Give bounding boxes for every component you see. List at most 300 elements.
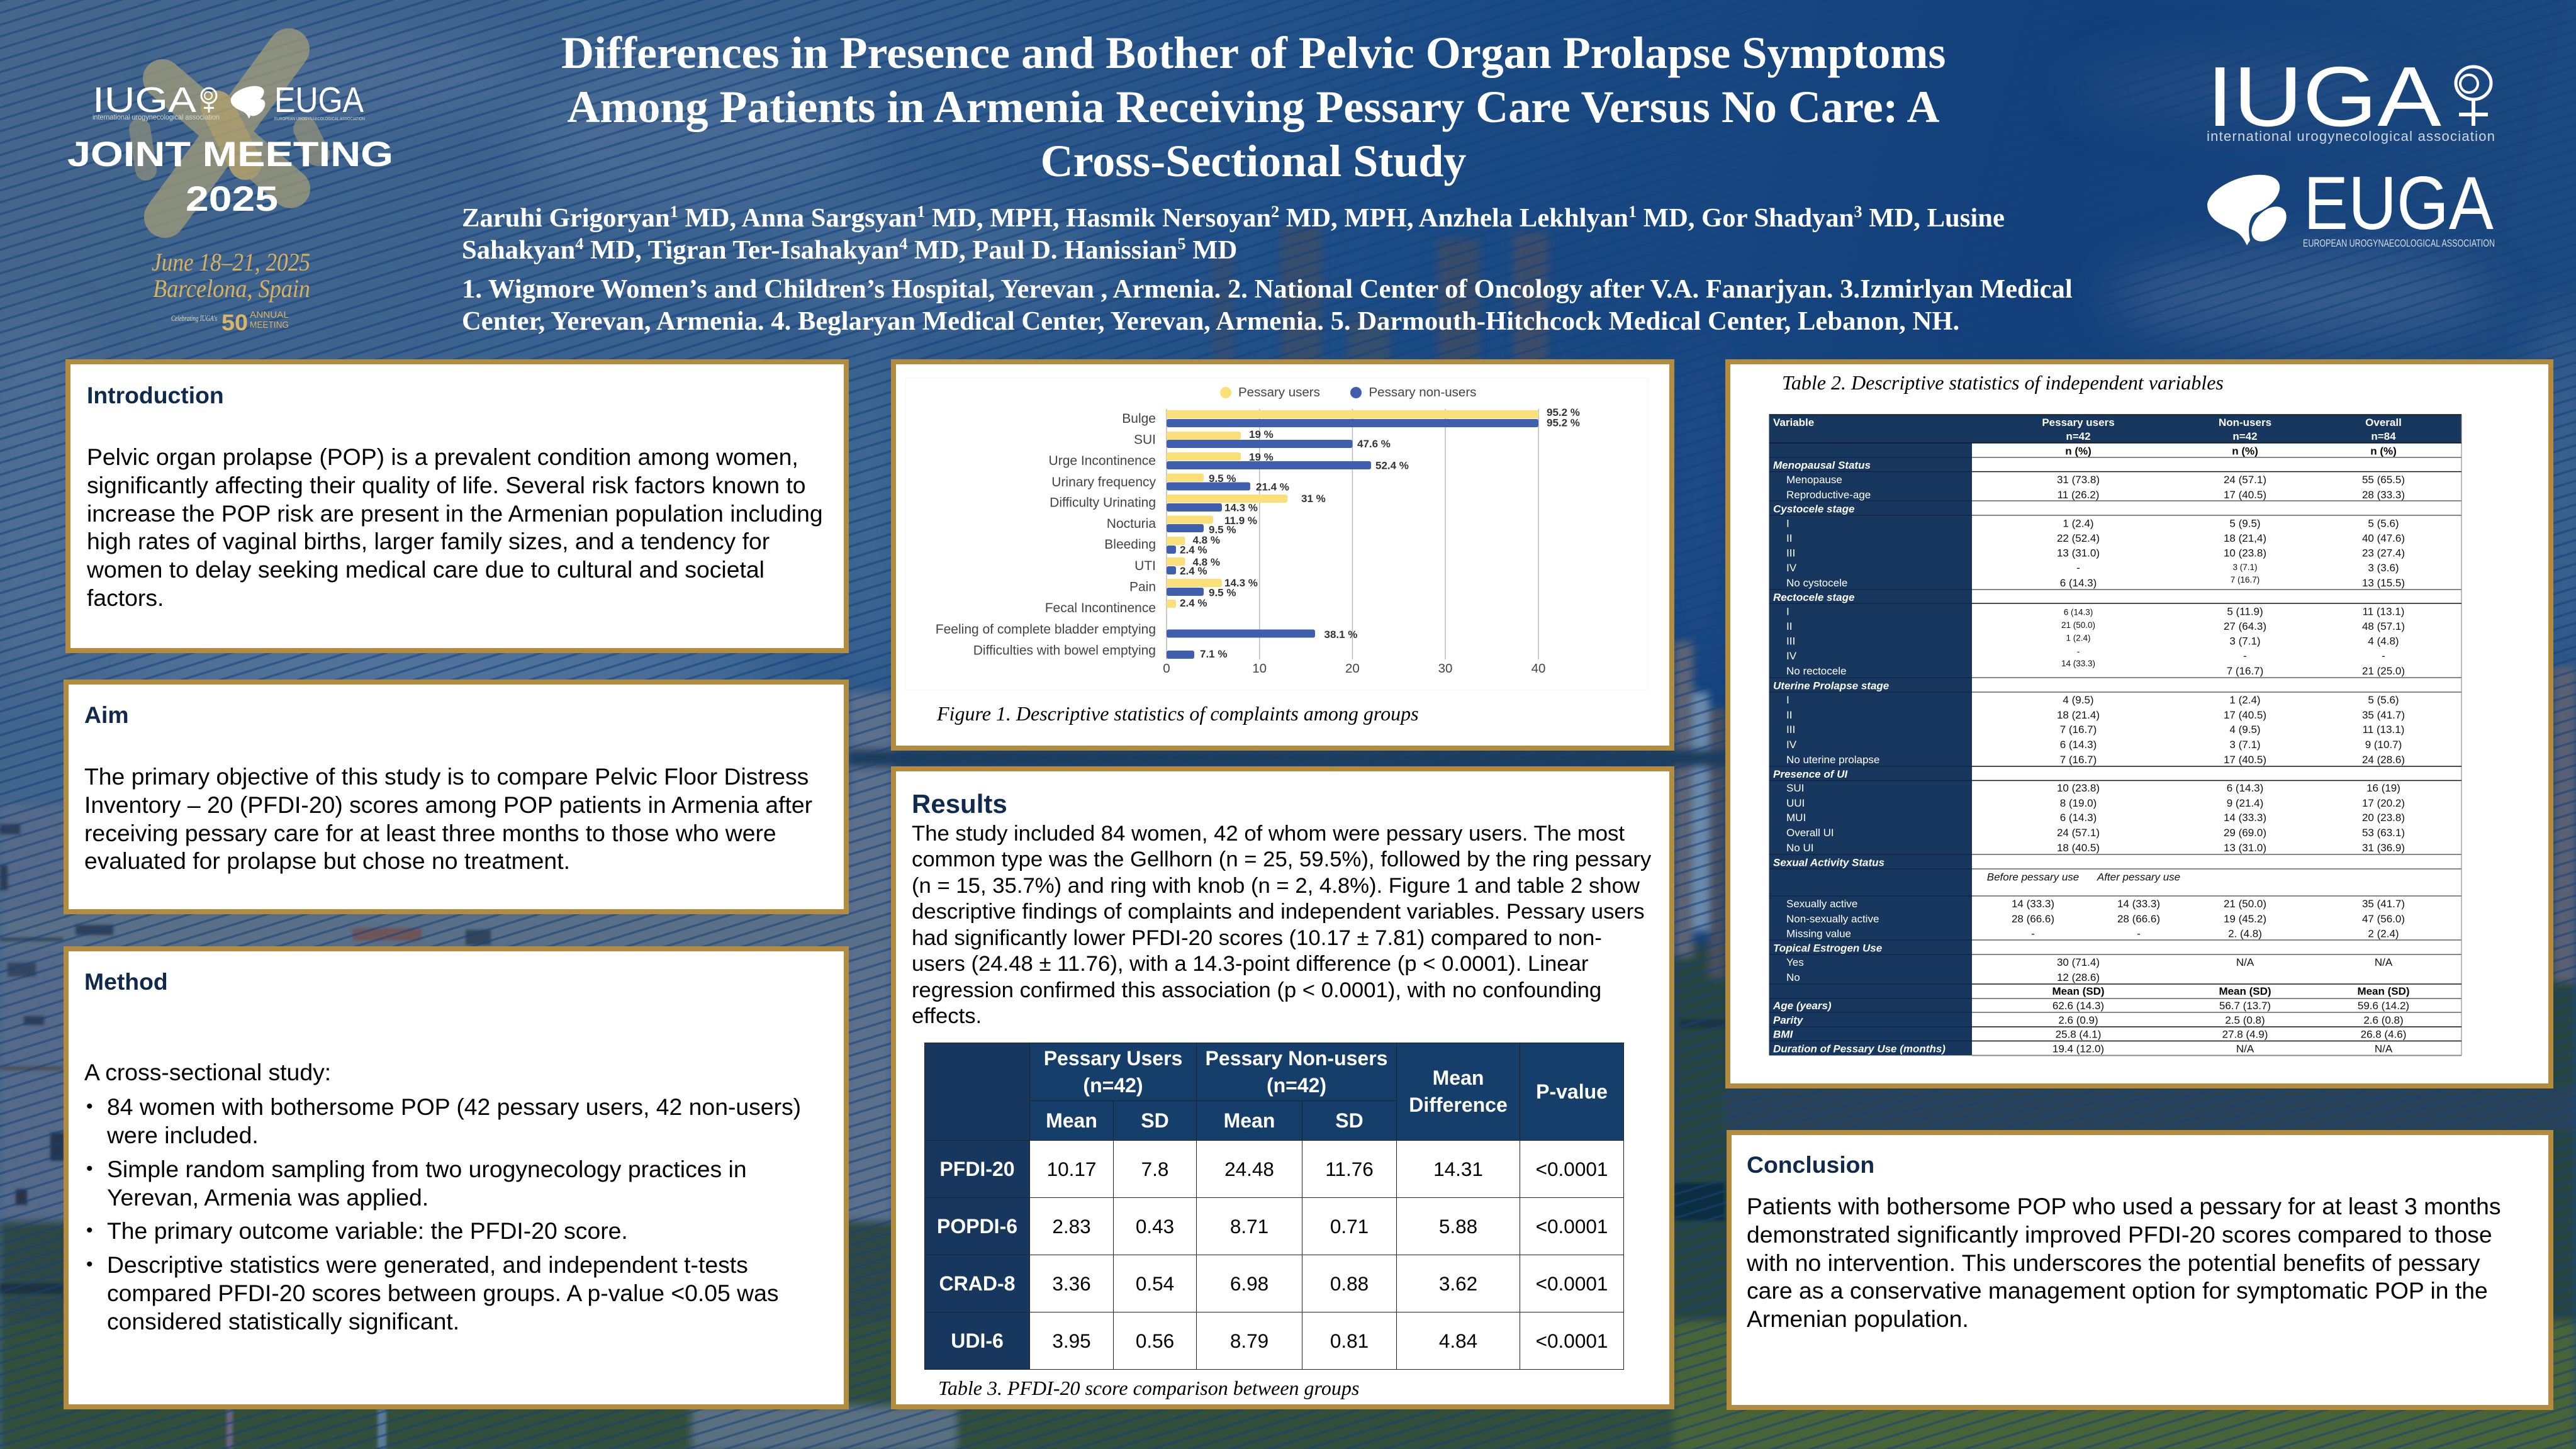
introduction text: significantly affecting their quality of life. Several risk factors known to (87, 472, 805, 498)
row group: cystocele stage: 18 (21,4) (2224, 532, 2266, 544)
gold X emblem (140, 49, 318, 217)
bar value labels: 95.2 % (1547, 417, 1580, 429)
row group: rectocele stage: 5 (11.9) (2227, 605, 2263, 617)
table header: Overall (2365, 417, 2402, 428)
introduction text: increase the POP risk are present in the Armenian population including (87, 500, 823, 527)
table header: n=42 (2232, 430, 2258, 442)
row group: rectocele stage: 6 (14.3) (2064, 608, 2093, 617)
authors: Zaruhi Grigoryan1 MD, Anna Sargsyan1 MD, MPH, Hasmik Nersoyan2 MD, MPH, Anzhela Lekhlyan1 MD, Gor Shadyan3 MD, Lusine (462, 202, 2005, 233)
table header: Pessary users (2042, 417, 2115, 428)
row group: rectocele stage: 21 (25.0) (2362, 665, 2405, 677)
row group: continuous variables: 26.8 (4.6) (2361, 1028, 2406, 1040)
table 3: PFDI-20 comparison: 0.54 (1136, 1272, 1174, 1295)
row group: cystocele stage: 5 (9.5) (2229, 517, 2261, 529)
results text: common type was the Gellhorn (n = 25, 59.5%), followed by the ring pessary (912, 848, 1651, 871)
row group: uterine prolapse stage: 17 (40.5) (2224, 754, 2266, 766)
table 3: PFDI-20 comparison: Mean (1224, 1109, 1275, 1131)
table 3: PFDI-20 comparison: 14.31 (1433, 1158, 1483, 1180)
panel: table 2 (1725, 359, 2553, 1088)
table 3: PFDI-20 comparison: SD (1335, 1109, 1364, 1131)
row group: menopausal status: 55 (65.5) (2362, 474, 2405, 486)
row group: uterine prolapse stage: 17 (40.5) (2224, 709, 2266, 721)
x axis labels (1163, 661, 1545, 676)
row group: continuous variables: 19.4 (12.0) (2052, 1043, 2104, 1055)
table 3: PFDI-20 comparison: 4.84 (1439, 1329, 1477, 1351)
table 2: descriptive statistics (1765, 409, 2467, 1060)
bar value labels: 9.5 % (1209, 523, 1236, 536)
bar value labels: 4.8 % (1193, 534, 1220, 546)
panel: aim (64, 680, 849, 914)
panel: method: • (86, 1254, 93, 1275)
table 3: PFDI-20 comparison: 7.8 (1141, 1158, 1168, 1180)
row group: uterine prolapse stage: 4 (9.5) (2063, 694, 2094, 706)
introduction text: women to delay seeking medical care due to cultural and societal (87, 556, 764, 583)
authors (462, 202, 2005, 265)
row group: uterine prolapse stage (1773, 680, 2405, 766)
heading: method: Method (84, 968, 168, 995)
table 3: PFDI-20 comparison: PFDI-20 (939, 1158, 1015, 1180)
row group: sexual activity status: After pessary use (2097, 871, 2180, 883)
50th annual meeting mark: ANNUAL (250, 310, 289, 320)
aim text: evaluated for prolapse but chose no treatment. (84, 848, 570, 874)
row group: presence of UI: 24 (57.1) (2057, 827, 2100, 839)
results text: users (24.48 ± 11.76), with a 14.3-point difference (p < 0.0001). Linear (912, 952, 1588, 976)
row group: uterine prolapse stage: 9 (10.7) (2365, 739, 2402, 751)
row group: rectocele stage: II (1786, 620, 1792, 632)
caption: table 3: Table 3. PFDI-20 score comparison between groups (938, 1377, 1359, 1399)
panel: results (891, 766, 1674, 1409)
row group: presence of UI: 14 (33.3) (2224, 812, 2266, 824)
row group: rectocele stage: Rectocele stage (1773, 591, 1854, 603)
table 3: PFDI-20 comparison: P-value (1536, 1080, 1608, 1102)
row group: continuous variables: N/A (2375, 1043, 2393, 1055)
bullet: statistics: compared PFDI-20 scores between groups. A p-value <0.05 was (107, 1280, 779, 1306)
row group: uterine prolapse stage: II (1786, 709, 1792, 721)
introduction text (87, 444, 823, 611)
row group: sexual activity status: 35 (41.7) (2362, 898, 2405, 910)
bar value labels: 21.4 % (1256, 481, 1289, 493)
row group: presence of UI: 20 (23.8) (2362, 812, 2405, 824)
table 3: PFDI-20 comparison: 8.79 (1230, 1329, 1268, 1351)
row group: menopausal status: Menopausal Status (1773, 459, 1871, 471)
row group: rectocele stage: III (1786, 635, 1795, 647)
legend: Pessary non-users (1369, 385, 1476, 400)
table 3: PFDI-20 comparison: 0.56 (1136, 1329, 1174, 1351)
category labels: Fecal Incontinence (1045, 601, 1156, 615)
row group: sexual activity status: Missing value (1786, 927, 1851, 940)
row group: continuous variables (1772, 985, 2410, 1055)
panel: conclusion (1727, 1130, 2553, 1410)
aim text: receiving pessary care for at least three months to those who were (84, 820, 776, 846)
EUGA mark (2207, 161, 2495, 249)
row group: sexual activity status: 14 (33.3) (2012, 898, 2054, 910)
row group: sexual activity status: 14 (33.3) (2117, 898, 2160, 910)
row group: presence of UI: Overall UI (1786, 827, 1834, 839)
category labels (936, 411, 1156, 658)
row group: uterine prolapse stage: III (1786, 724, 1795, 736)
row group: menopausal status: Reproductive-age (1786, 489, 1871, 501)
logos: IUGA and EUGA (2207, 57, 2495, 249)
row group: rectocele stage: 48 (57.1) (2362, 620, 2405, 632)
joint meeting title (67, 134, 393, 218)
panel: introduction (65, 359, 849, 653)
table 3: PFDI-20 comparison: (n=42) (1267, 1073, 1326, 1096)
table 3: PFDI-20 comparison: SD (1141, 1109, 1169, 1131)
caption: figure 1: Figure 1. Descriptive statistics of complaints among groups (937, 702, 1419, 725)
row group: cystocele stage: 6 (14.3) (2060, 577, 2097, 589)
introduction text: Pelvic organ prolapse (POP) is a prevalent condition among women, (87, 444, 798, 470)
conclusion text: Patients with bothersome POP who used a pessary for at least 3 months (1747, 1193, 2501, 1219)
row group: presence of UI: 13 (31.0) (2224, 842, 2266, 854)
bullet: statistics (107, 1251, 779, 1335)
table 3: PFDI-20 comparison: 2.83 (1052, 1214, 1091, 1237)
bullet: sample: were included. (107, 1122, 259, 1148)
table 3: PFDI-20 comparison: 6.98 (1230, 1272, 1268, 1295)
row group: continuous variables: 2.6 (0.8) (2363, 1014, 2404, 1026)
panel: figure 1 (891, 359, 1674, 751)
row group: continuous variables: 2.6 (0.9) (2058, 1014, 2098, 1026)
results text: (n = 15, 35.7%) and ring with knob (n = 2, 4.8%). Figure 1 and table 2 show (912, 874, 1640, 898)
row group: rectocele stage: 21 (50.0) (2061, 620, 2095, 630)
table 3: PFDI-20 comparison: Pessary Users (1044, 1047, 1182, 1070)
category labels: Difficulties with bowel emptying (973, 643, 1156, 658)
legend (1220, 385, 1476, 400)
row group: sexual activity status: - (2031, 927, 2035, 940)
row group: uterine prolapse stage: 35 (41.7) (2362, 709, 2405, 721)
results text (912, 821, 1651, 1030)
table 3: PFDI-20 comparison: 5.88 (1439, 1214, 1477, 1237)
row group: sexual activity status: Sexual Activity Status (1773, 857, 1884, 869)
bullet: sample (86, 1094, 801, 1148)
category labels: Urge Incontinence (1049, 454, 1156, 468)
row group: topical estrogen use (1773, 942, 2393, 983)
row group: continuous variables: Age (years) (1772, 1000, 1832, 1012)
row group: menopausal status: Menopause (1786, 474, 1842, 486)
bar value labels: 31 % (1301, 493, 1326, 505)
table 3: PFDI-20 comparison: 0.88 (1330, 1272, 1369, 1295)
row group: sexual activity status: 28 (66.6) (2117, 913, 2160, 925)
50th annual meeting mark: MEETING (250, 320, 289, 330)
row group: cystocele stage: 3 (7.1) (2232, 562, 2258, 572)
yellow bars: pessary users (1167, 410, 1538, 608)
female symbol (2456, 67, 2491, 126)
row group: presence of UI: 6 (14.3) (2227, 782, 2263, 794)
title: Among Patients in Armenia Receiving Pessary Care Versus No Care: A (567, 82, 1940, 132)
row group: menopausal status: 31 (73.8) (2057, 474, 2100, 486)
bar value labels: 14.3 % (1224, 502, 1258, 513)
heading: results: Results (912, 789, 1007, 819)
row group: uterine prolapse stage: 18 (21.4) (2057, 709, 2100, 721)
row group: rectocele stage (1773, 591, 2405, 677)
title (561, 28, 1946, 186)
row group: presence of UI: 8 (19.0) (2060, 797, 2097, 809)
row group: cystocele stage: 40 (47.6) (2362, 532, 2405, 544)
row group: rectocele stage: - (2382, 650, 2385, 662)
bar value labels: 52.4 % (1375, 459, 1409, 472)
results text: regression confirmed this association (p < 0.0001), with no confounding (912, 978, 1601, 1002)
table 3: PFDI-20 comparison: 0.43 (1136, 1214, 1174, 1237)
bar value labels: 19 % (1249, 428, 1274, 440)
table 3: PFDI-20 comparison: (n=42) (1083, 1073, 1143, 1096)
authors: Sahakyan4 MD, Tigran Ter-Isahakyan4 MD, Paul D. Hanissian5 MD (462, 234, 1237, 265)
row group: menopausal status: 17 (40.5) (2224, 489, 2266, 501)
row group: presence of UI: SUI (1786, 782, 1804, 794)
conference logo block (67, 28, 393, 335)
IUGA wordmark (2207, 49, 2495, 144)
method intro line: A cross-sectional study: (84, 1059, 331, 1085)
table 3: PFDI-20 comparison: Mean (1433, 1066, 1484, 1089)
category labels: Difficulty Urinating (1050, 496, 1156, 510)
bullet: sampling (86, 1156, 747, 1211)
table 3: PFDI-20 comparison: CRAD-8 (939, 1272, 1015, 1295)
affiliations (462, 274, 2073, 336)
row group: continuous variables: 27.8 (4.9) (2222, 1028, 2268, 1040)
row group: uterine prolapse stage: 11 (13.1) (2363, 724, 2404, 736)
logo: EUGA small: EUGA (274, 80, 364, 120)
logo: IUGA small: international urogynecological association (92, 113, 220, 121)
category labels: Bulge (1122, 411, 1156, 426)
table 3: PFDI-20 comparison: <0.0001 (1536, 1158, 1608, 1180)
category labels: SUI (1134, 433, 1156, 447)
panel: method: • (86, 1158, 93, 1179)
row group: continuous variables: 59.6 (14.2) (2358, 1000, 2409, 1012)
row group: continuous variables: 62.6 (14.3) (2052, 1000, 2104, 1012)
row group: presence of UI: 16 (19) (2366, 782, 2400, 794)
table 3: PFDI-20 comparison: 10.17 (1047, 1158, 1096, 1180)
row group: uterine prolapse stage: 6 (14.3) (2060, 739, 2097, 751)
x axis labels: 10 (1252, 661, 1267, 676)
table 3: PFDI-20 comparison: Mean (1046, 1109, 1097, 1131)
row group: sexual activity status: 19 (45.2) (2224, 913, 2266, 925)
bar value labels: 2.4 % (1180, 544, 1207, 556)
x axis labels: 0 (1163, 661, 1170, 676)
row group: presence of UI: 31 (36.9) (2362, 842, 2405, 854)
table 3: PFDI-20 comparison: 24.48 (1224, 1158, 1274, 1180)
row group: uterine prolapse stage: I (1786, 694, 1789, 706)
category labels: Pain (1129, 580, 1156, 594)
bar value labels: 7.1 % (1200, 648, 1227, 660)
table 3: PFDI-20 comparison: <0.0001 (1536, 1214, 1608, 1237)
row group: continuous variables: Duration of Pessary Use (months) (1773, 1043, 1946, 1055)
row group: sexual activity status: 2. (4.8) (2228, 927, 2262, 940)
table header: n=42 (2066, 430, 2091, 442)
row group: cystocele stage: II (1786, 532, 1792, 544)
row group: uterine prolapse stage: 5 (5.6) (2368, 694, 2399, 706)
conclusion text: with no intervention. This underscores the potential benefits of pessary (1747, 1250, 2480, 1276)
row group: presence of UI: 9 (21.4) (2227, 797, 2263, 809)
introduction text: high rates of vaginal births, larger family sizes, and a tendency for (87, 528, 770, 554)
table 3: PFDI-20 comparison: POPDI-6 (937, 1214, 1017, 1237)
bullet: sample: 84 women with bothersome POP (42 pessary users, 42 non-users) (107, 1094, 801, 1120)
legend: Pessary users (1238, 385, 1320, 400)
row group: presence of UI: Presence of UI (1773, 768, 1848, 780)
row group: cystocele stage: 10 (23.8) (2224, 547, 2266, 559)
table 3: PFDI-20 comparison: 0.81 (1330, 1329, 1369, 1351)
table 3: PFDI-20 comparison: 11.76 (1325, 1158, 1374, 1180)
row group: sexual activity status: 2 (2.4) (2368, 927, 2399, 940)
affiliations: 1. Wigmore Women’s and Children’s Hospital, Yerevan , Armenia. 2. National Center of Oncology after V.A. Fanarjyan. 3.Izmirlyan Medical (462, 274, 2073, 304)
row group: cystocele stage: 1 (2.4) (2063, 517, 2094, 529)
table 3: PFDI-20 comparison: <0.0001 (1536, 1272, 1608, 1295)
heading: aim: Aim (84, 702, 129, 728)
row group: cystocele stage: 13 (31.0) (2057, 547, 2100, 559)
row group: presence of UI: 18 (40.5) (2057, 842, 2100, 854)
row group: uterine prolapse stage: 7 (16.7) (2060, 754, 2097, 766)
x axis labels: 40 (1532, 661, 1545, 676)
results text: effects. (912, 1004, 982, 1028)
conference date and place (152, 248, 310, 323)
bullet: statistics: Descriptive statistics were generated, and independent t-tests (107, 1251, 748, 1278)
row group: continuous variables: Mean (SD) (2357, 985, 2410, 997)
row group: rectocele stage: 27 (64.3) (2224, 620, 2266, 632)
IUGA wordmark: international urogynecological association (2207, 128, 2495, 144)
results text: had significantly lower PFDI-20 scores (10.17 ± 7.81) compared to non- (912, 926, 1602, 950)
row group: uterine prolapse stage: Uterine Prolapse stage (1773, 680, 1889, 692)
conclusion text: Armenian population. (1747, 1306, 1969, 1332)
introduction text: factors. (87, 585, 164, 611)
row group: cystocele stage: 7 (16.7) (2231, 575, 2260, 585)
joint meeting title: 2025 (186, 179, 278, 218)
results text: The study included 84 women, 42 of whom were pessary users. The most (912, 822, 1625, 846)
row group: sexual activity status (1773, 857, 2405, 940)
row group: cystocele stage: 23 (27.4) (2362, 547, 2405, 559)
row group: sexual activity status: Sexually active (1786, 898, 1857, 910)
row group: sexual activity status: Before pessary use (1987, 871, 2079, 883)
heading: conclusion: Conclusion (1747, 1151, 1874, 1178)
row group: menopausal status: 11 (26.2) (2058, 489, 2099, 501)
affiliations: Center, Yerevan, Armenia. 4. Beglaryan Medical Center, Yerevan, Armenia. 5. Darmouth-Hitchcock Medical Center, Lebanon, NH. (462, 306, 1959, 336)
aim text (84, 763, 812, 874)
row group: topical estrogen use: Yes (1786, 956, 1804, 968)
row group: topical estrogen use: No (1786, 971, 1800, 983)
row group: cystocele stage: No cystocele (1786, 577, 1847, 589)
table header: n (%) (2370, 445, 2397, 457)
panel: method: • (86, 1220, 93, 1241)
row group: continuous variables: Mean (SD) (2219, 985, 2271, 997)
row group: topical estrogen use: 30 (71.4) (2057, 956, 2100, 968)
table 3: PFDI-20 comparison: 3.62 (1439, 1272, 1477, 1295)
bar value labels (1180, 406, 1580, 660)
panel: method (64, 946, 849, 1409)
row group: presence of UI: 53 (63.1) (2362, 827, 2405, 839)
table header: n (%) (2065, 445, 2092, 457)
x axis labels: 30 (1438, 661, 1452, 676)
row group: topical estrogen use: 12 (28.6) (2057, 971, 2100, 983)
row group: cystocele stage: Cystocele stage (1773, 503, 1854, 515)
50th annual meeting mark: 50 (221, 310, 248, 335)
category labels: Feeling of complete bladder emptying (936, 622, 1156, 637)
row group: cystocele stage: IV (1786, 562, 1797, 574)
category labels: Nocturia (1107, 517, 1156, 531)
conference date and place: Barcelona, Spain (153, 274, 310, 303)
table 3: PFDI-20 comparison: 8.71 (1230, 1214, 1268, 1237)
heading: introduction: Introduction (87, 382, 224, 408)
bullet: statistics: considered statistically significant. (107, 1308, 459, 1334)
x axis labels: 20 (1345, 661, 1360, 676)
bar value labels: 95.2 % (1547, 406, 1580, 418)
row group: cystocele stage: 22 (52.4) (2057, 532, 2100, 544)
row group: cystocele stage: 5 (5.6) (2368, 517, 2399, 529)
bar value labels: 9.5 % (1209, 586, 1236, 599)
row group: menopausal status (1773, 459, 2405, 501)
row group: rectocele stage: - (2243, 650, 2247, 662)
row group: presence of UI: UUI (1786, 797, 1805, 809)
row group: rectocele stage: 11 (13.1) (2363, 605, 2404, 617)
category labels: Urinary frequency (1051, 475, 1156, 490)
logo: IUGA small: IUGA (92, 80, 196, 120)
table header: Non-users (2219, 417, 2271, 428)
bar value labels: 47.6 % (1357, 438, 1391, 450)
title: Cross-Sectional Study (1041, 136, 1466, 186)
row group: continuous variables: N/A (2236, 1043, 2254, 1055)
row group: presence of UI (1773, 768, 2405, 854)
row group: uterine prolapse stage: 4 (9.5) (2229, 724, 2261, 736)
row group: cystocele stage: 3 (3.6) (2368, 562, 2399, 574)
row group: sexual activity status: 21 (50.0) (2224, 898, 2266, 910)
title: Differences in Presence and Bother of Pelvic Organ Prolapse Symptoms (561, 28, 1946, 78)
row group: uterine prolapse stage: 24 (28.6) (2362, 754, 2405, 766)
row group: uterine prolapse stage: 3 (7.1) (2229, 739, 2261, 751)
row group: rectocele stage: 4 (4.8) (2368, 635, 2399, 647)
category labels: Bleeding (1104, 537, 1156, 552)
bar value labels: 2.4 % (1180, 565, 1207, 577)
row group: continuous variables: 2.5 (0.8) (2225, 1014, 2265, 1026)
table 3: PFDI-20 comparison: 0.71 (1330, 1214, 1369, 1237)
row group: cystocele stage (1773, 503, 2405, 589)
bar value labels: 2.4 % (1180, 597, 1207, 609)
table header: Variable (1773, 417, 1814, 428)
row group: uterine prolapse stage: 1 (2.4) (2229, 694, 2261, 706)
row group: uterine prolapse stage: IV (1786, 739, 1797, 751)
conference date and place: June 18–21, 2025 (152, 248, 310, 276)
row group: uterine prolapse stage: No uterine prolapse (1786, 754, 1879, 766)
bar value labels: 38.1 % (1324, 629, 1357, 641)
blue bars: pessary non-users (1167, 419, 1538, 659)
bar value labels: 11.9 % (1224, 515, 1257, 527)
row group: cystocele stage: III (1786, 547, 1795, 559)
row group: rectocele stage: 14 (33.3) (2061, 659, 2095, 668)
bar value labels: 19 % (1249, 451, 1274, 463)
joint meeting title: JOINT MEETING (67, 134, 393, 174)
row group: topical estrogen use: Topical Estrogen Use (1773, 942, 1882, 954)
table 3: PFDI-20 comparison: Difference (1409, 1094, 1508, 1116)
row group: sexual activity status: Non-sexually active (1786, 913, 1879, 925)
table 3: PFDI-20 comparison (924, 1043, 1624, 1370)
aim text: The primary objective of this study is to compare Pelvic Floor Distress (84, 763, 809, 790)
row group: continuous variables: 25.8 (4.1) (2056, 1028, 2101, 1040)
row group: rectocele stage: - (2077, 647, 2080, 656)
row group: cystocele stage: 13 (15.5) (2362, 577, 2405, 589)
row group: rectocele stage: 1 (2.4) (2066, 634, 2091, 643)
row group: continuous variables: Mean (SD) (2052, 985, 2105, 997)
bar chart: complaints among groups (905, 378, 1649, 690)
table header: n=84 (2371, 430, 2396, 442)
row group: presence of UI: No UI (1786, 842, 1813, 854)
row group: continuous variables: BMI (1773, 1028, 1793, 1040)
results text: descriptive findings of complaints and independent variables. Pessary users (912, 900, 1645, 924)
row group: rectocele stage: 3 (7.1) (2229, 635, 2261, 647)
row group: menopausal status: 24 (57.1) (2224, 474, 2266, 486)
row group: uterine prolapse stage: 7 (16.7) (2060, 724, 2097, 736)
row group: topical estrogen use: N/A (2236, 956, 2254, 968)
row group: cystocele stage: I (1786, 517, 1789, 529)
bullet: sampling: Yerevan, Armenia was applied. (107, 1184, 428, 1211)
conference date and place: Celebrating IUGA's (171, 313, 217, 323)
logo: EUGA small (231, 80, 365, 121)
row group: continuous variables: Parity (1773, 1014, 1804, 1026)
row group: sexual activity status: - (2137, 927, 2141, 940)
row group: rectocele stage: I (1786, 605, 1789, 617)
